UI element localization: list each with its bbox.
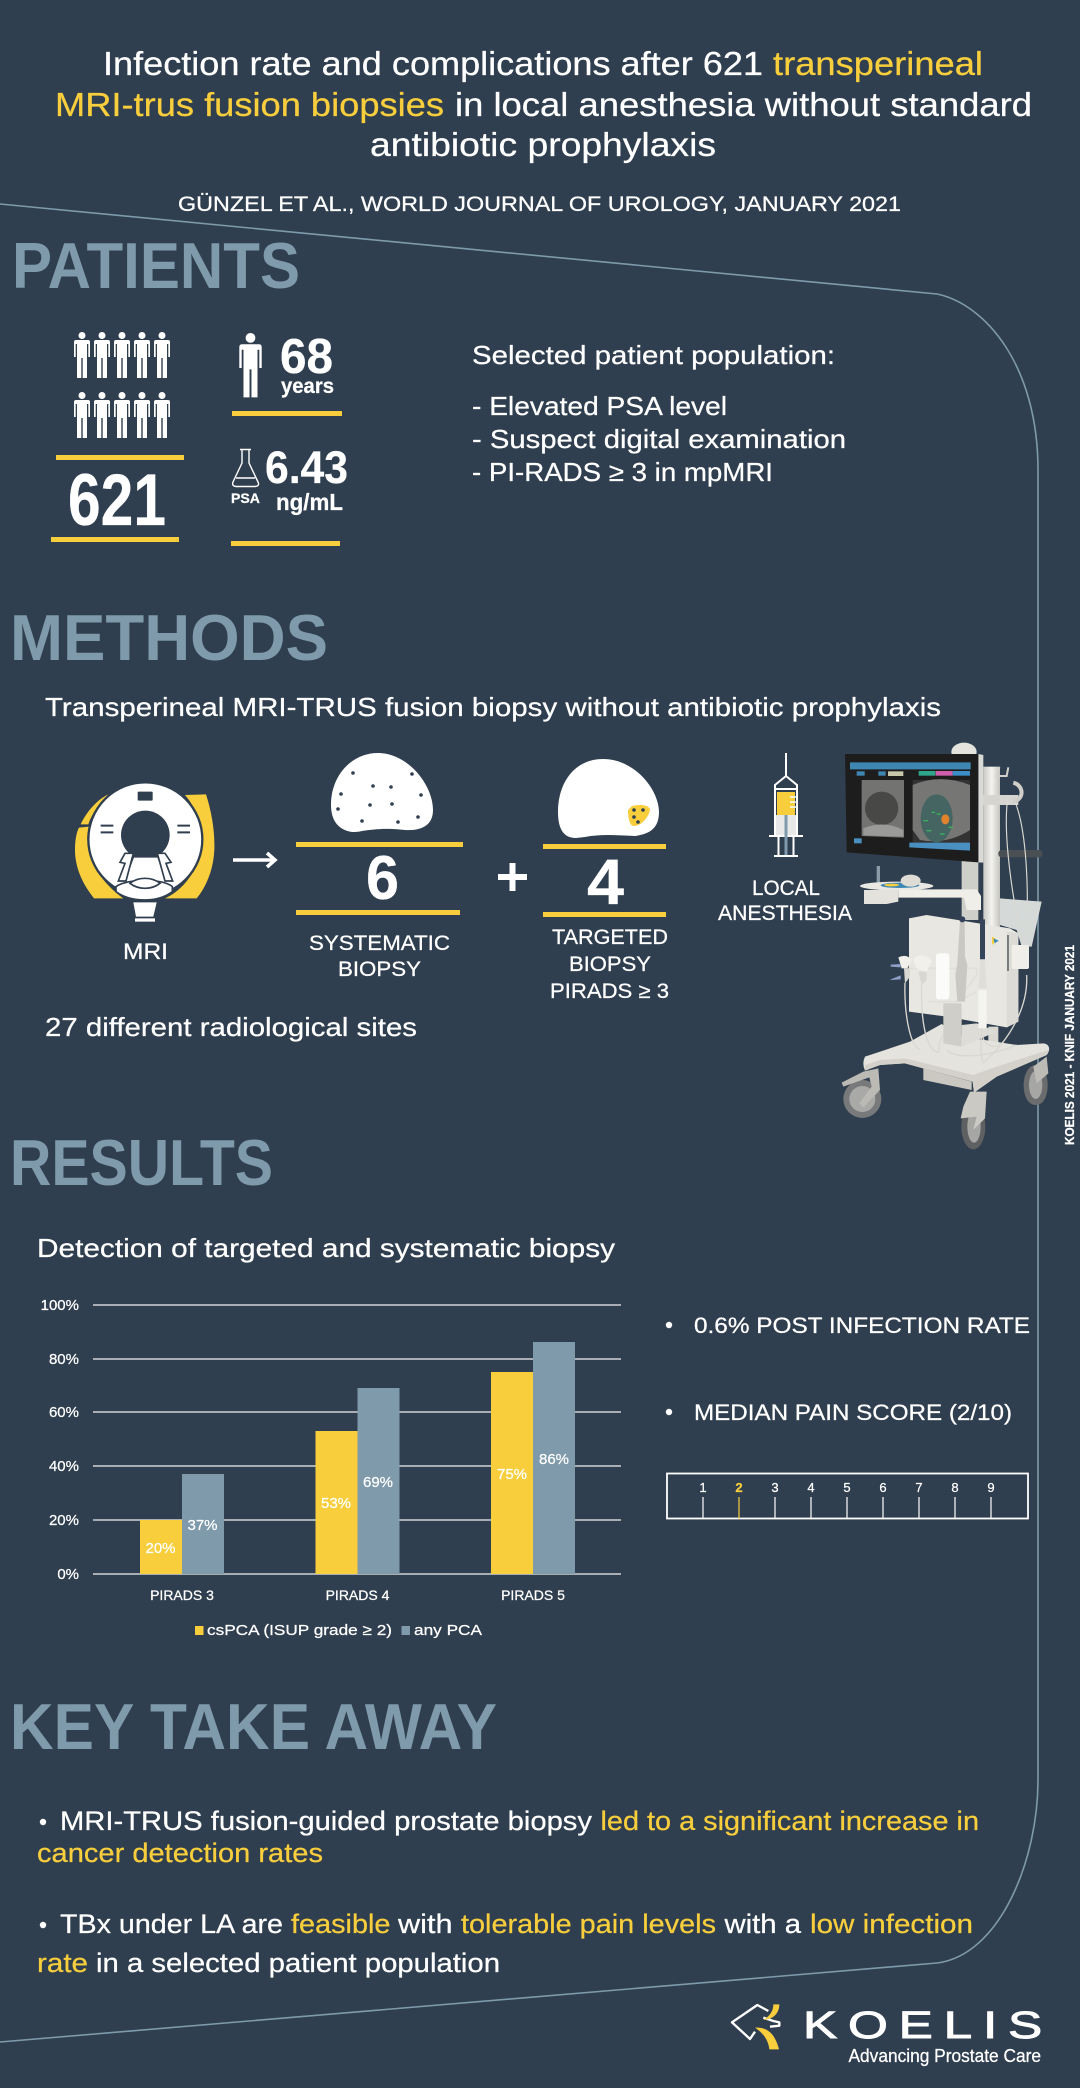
bar chart: detection by PIRADS: 69% [363,1474,393,1491]
legend: csPCA (ISUP grade ≥ 2) [207,1622,392,1639]
bar chart: detection by PIRADS: 37% [187,1517,218,1534]
systematic biopsy: BIOPSY [338,958,421,981]
bar chart: detection by PIRADS: 0% [57,1566,79,1583]
bullets: results: 0.6% POST INFECTION RATE [694,1313,1030,1338]
takeaway 2: in a selected patient population [96,1948,500,1978]
takeaway 2: with [397,1909,452,1939]
text block: selected patient population [472,340,846,487]
logo: KOELIS [732,2004,1053,2066]
bar chart: detection by PIRADS: 80% [49,1351,79,1368]
legend: any PCA [414,1622,482,1639]
heading: methods: METHODS [10,601,328,674]
label: local anesthesia: ANESTHESIA [718,902,852,925]
stat: PSA 6.43 ng/mL: PSA [231,490,260,506]
icon: flask [233,450,259,486]
takeaway 1: led to a significant increase in [600,1806,979,1836]
pain scale: 1 [699,1480,707,1495]
title: Infection rate and complications after 621 [103,45,763,82]
icon: logo mark [732,2004,779,2049]
pain scale: 2 [735,1480,743,1495]
systematic biopsy: SYSTEMATIC [309,932,450,955]
label: MRI: MRI [123,939,168,964]
title: antibiotic prophylaxis [370,126,716,163]
pain scale [667,1474,1028,1519]
logo: KOELIS: KOELIS [803,2005,1053,2047]
takeaway 2: rate [37,1948,88,1978]
icon: MRI scanner [75,782,214,922]
targeted biopsy: PIRADS ≥ 3 [550,980,669,1003]
pain scale: 3 [771,1480,779,1495]
cart: base, box, probes and wheels [842,915,1049,1149]
stat: 621 patients: 621 [68,460,166,541]
bullets: results: MEDIAN PAIN SCORE (2/10) [694,1400,1012,1425]
heading: results: RESULTS [10,1126,273,1199]
takeaway 1 [37,1806,979,1868]
pain scale: 9 [987,1480,995,1495]
icon group: ten patients [74,332,170,438]
systematic biopsy [296,753,463,981]
plus sign [498,863,527,891]
systematic biopsy: 6 [366,844,399,913]
pain scale: 6 [879,1480,887,1495]
bar chart: detection by PIRADS: 20% [49,1512,79,1529]
text block: selected patient population: - Suspect digital examination [472,424,846,454]
logo: KOELIS: Advancing Prostate Care [848,2046,1041,2066]
stat: age 68 years: years [281,375,334,398]
bar chart: detection by PIRADS: 75% [497,1466,527,1483]
bullets: results [666,1313,1030,1425]
bar chart: detection by PIRADS: PIRADS 3 [150,1587,214,1603]
icon: prostate with target lesion [558,759,659,838]
label: local anesthesia: LOCAL [752,877,820,900]
text: radiological sites: 27 different radiological sites [45,1012,417,1042]
bar chart: detection by PIRADS: 60% [49,1404,79,1421]
cart: monitor and pole [845,743,1042,947]
subtitle: methods: Transperineal MRI-TRUS fusion biopsy without antibiotic prophylaxis [45,692,941,722]
side credit: KOELIS 2021 - KNIF JANUARY 2021 [1062,945,1077,1145]
bar chart: detection by PIRADS: 86% [539,1451,569,1468]
legend [195,1622,482,1639]
pain scale: 7 [915,1480,923,1495]
chart title: Detection of targeted and systematic biopsy [37,1233,615,1263]
stat: age 68 years: 68 [280,330,333,384]
bar chart: detection by PIRADS: 100% [41,1297,79,1314]
takeaway 2: with a [723,1909,802,1939]
bar chart: detection by PIRADS: 53% [321,1495,351,1512]
targeted biopsy: 4 [587,846,624,918]
bar chart: detection by PIRADS: 20% [145,1540,176,1557]
targeted biopsy: TARGETED [552,926,668,949]
stat: PSA 6.43 ng/mL: ng/mL [276,489,343,515]
text block: selected patient population: - PI-RADS ≥ 3 in mpMRI [472,457,773,487]
takeaway 2: feasible [291,1909,390,1939]
pain scale: 5 [843,1480,851,1495]
title: MRI-trus fusion biopsies [55,86,444,123]
heading: patients: PATIENTS [12,229,300,302]
stat: PSA 6.43 ng/mL [231,442,348,546]
targeted biopsy: BIOPSY [569,953,651,976]
takeaway 2: tolerable pain levels [461,1909,716,1939]
arrow: MRI to biopsy [233,853,275,867]
title: transperineal [773,45,983,82]
takeaway 2: low infection [810,1909,973,1939]
takeaway 1: MRI-TRUS fusion-guided prostate biopsy [60,1806,593,1836]
stat: PSA 6.43 ng/mL: 6.43 [265,442,348,493]
image: fusion biopsy cart [842,743,1049,1149]
icon: syringe [769,753,803,856]
pain scale: 4 [807,1480,815,1495]
text block: selected patient population: - Elevated PSA level [472,391,727,421]
bar chart: detection by PIRADS: PIRADS 4 [326,1587,390,1603]
targeted biopsy [543,759,669,1003]
citation: GÜNZEL ET AL., WORLD JOURNAL OF UROLOGY, JANUARY 2021 [178,193,901,216]
bar chart: detection by PIRADS: 40% [49,1458,79,1475]
bar chart: detection by PIRADS: PIRADS 5 [501,1587,565,1603]
takeaway 2 [37,1909,973,1978]
title [55,45,1032,163]
takeaway 2: TBx under LA are [60,1909,283,1939]
heading: key take away: KEY TAKE AWAY [10,1690,497,1763]
label: local anesthesia [718,877,852,925]
bar chart: detection by PIRADS [41,1297,621,1639]
icon: prostate with systematic samples [331,753,433,832]
pain scale: 8 [951,1480,959,1495]
title: in local anesthesia without standard [455,86,1032,123]
takeaway 1: cancer detection rates [37,1838,323,1868]
stat: age 68 years [232,330,342,416]
text block: selected patient population: Selected patient population: [472,340,835,370]
